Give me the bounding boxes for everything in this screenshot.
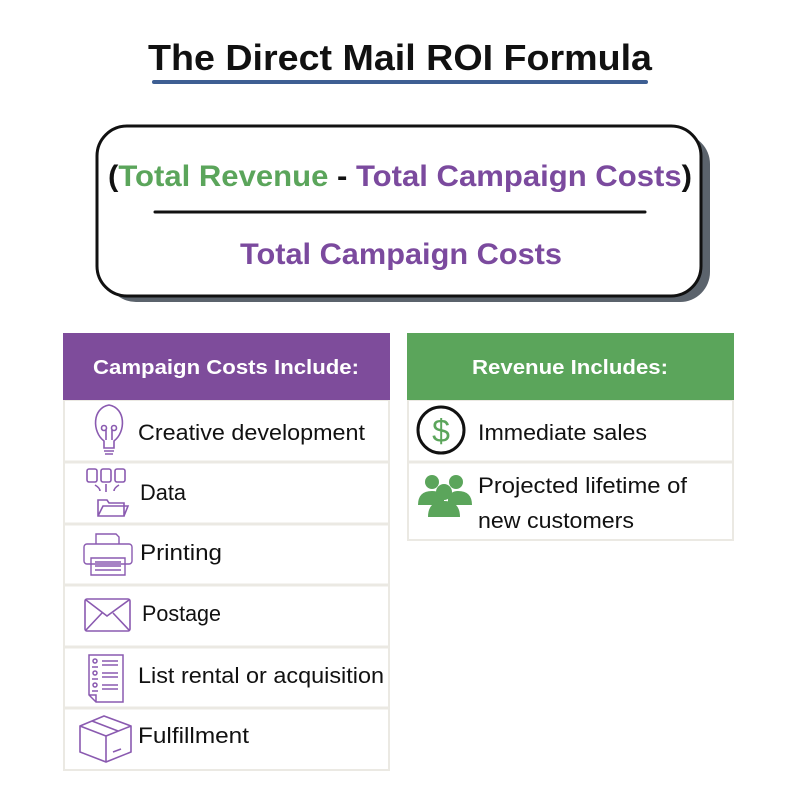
panel: revenue: Immediate sales (478, 420, 647, 445)
panel: revenue: Projected lifetime of (478, 473, 688, 498)
panel: campaign costs: Printing (140, 540, 222, 565)
icon: data folder (87, 469, 128, 516)
header: campaign costs (63, 333, 390, 400)
formula box (97, 126, 710, 302)
panel: campaign costs: Fulfillment (138, 723, 249, 748)
header: campaign costs: Campaign Costs Include: (93, 357, 359, 379)
title: The Direct Mail ROI Formula (148, 37, 653, 78)
panel: campaign costs: Data (140, 480, 187, 505)
icon: printer (84, 534, 132, 575)
icon: list document (89, 655, 123, 702)
numerator: (Total Revenue - Total Campaign Costs ) (108, 160, 692, 193)
header: revenue: Revenue Includes: (472, 357, 668, 379)
icon: light bulb (96, 405, 122, 454)
panel: revenue: new customers (478, 508, 634, 533)
icon: envelope (85, 599, 130, 631)
panel: campaign costs: Postage (142, 601, 221, 626)
panel: campaign costs (63, 333, 390, 770)
denominator: Total Campaign Costs (240, 238, 562, 271)
panel: revenue (407, 333, 734, 540)
header: revenue (407, 333, 734, 400)
icon: dollar (418, 407, 464, 453)
panel: campaign costs: Creative development (138, 420, 365, 445)
icon: box (80, 716, 131, 762)
icon: dollar: $ (432, 413, 450, 449)
panel: campaign costs: List rental or acquisition (138, 663, 384, 688)
icon: people (418, 475, 472, 517)
